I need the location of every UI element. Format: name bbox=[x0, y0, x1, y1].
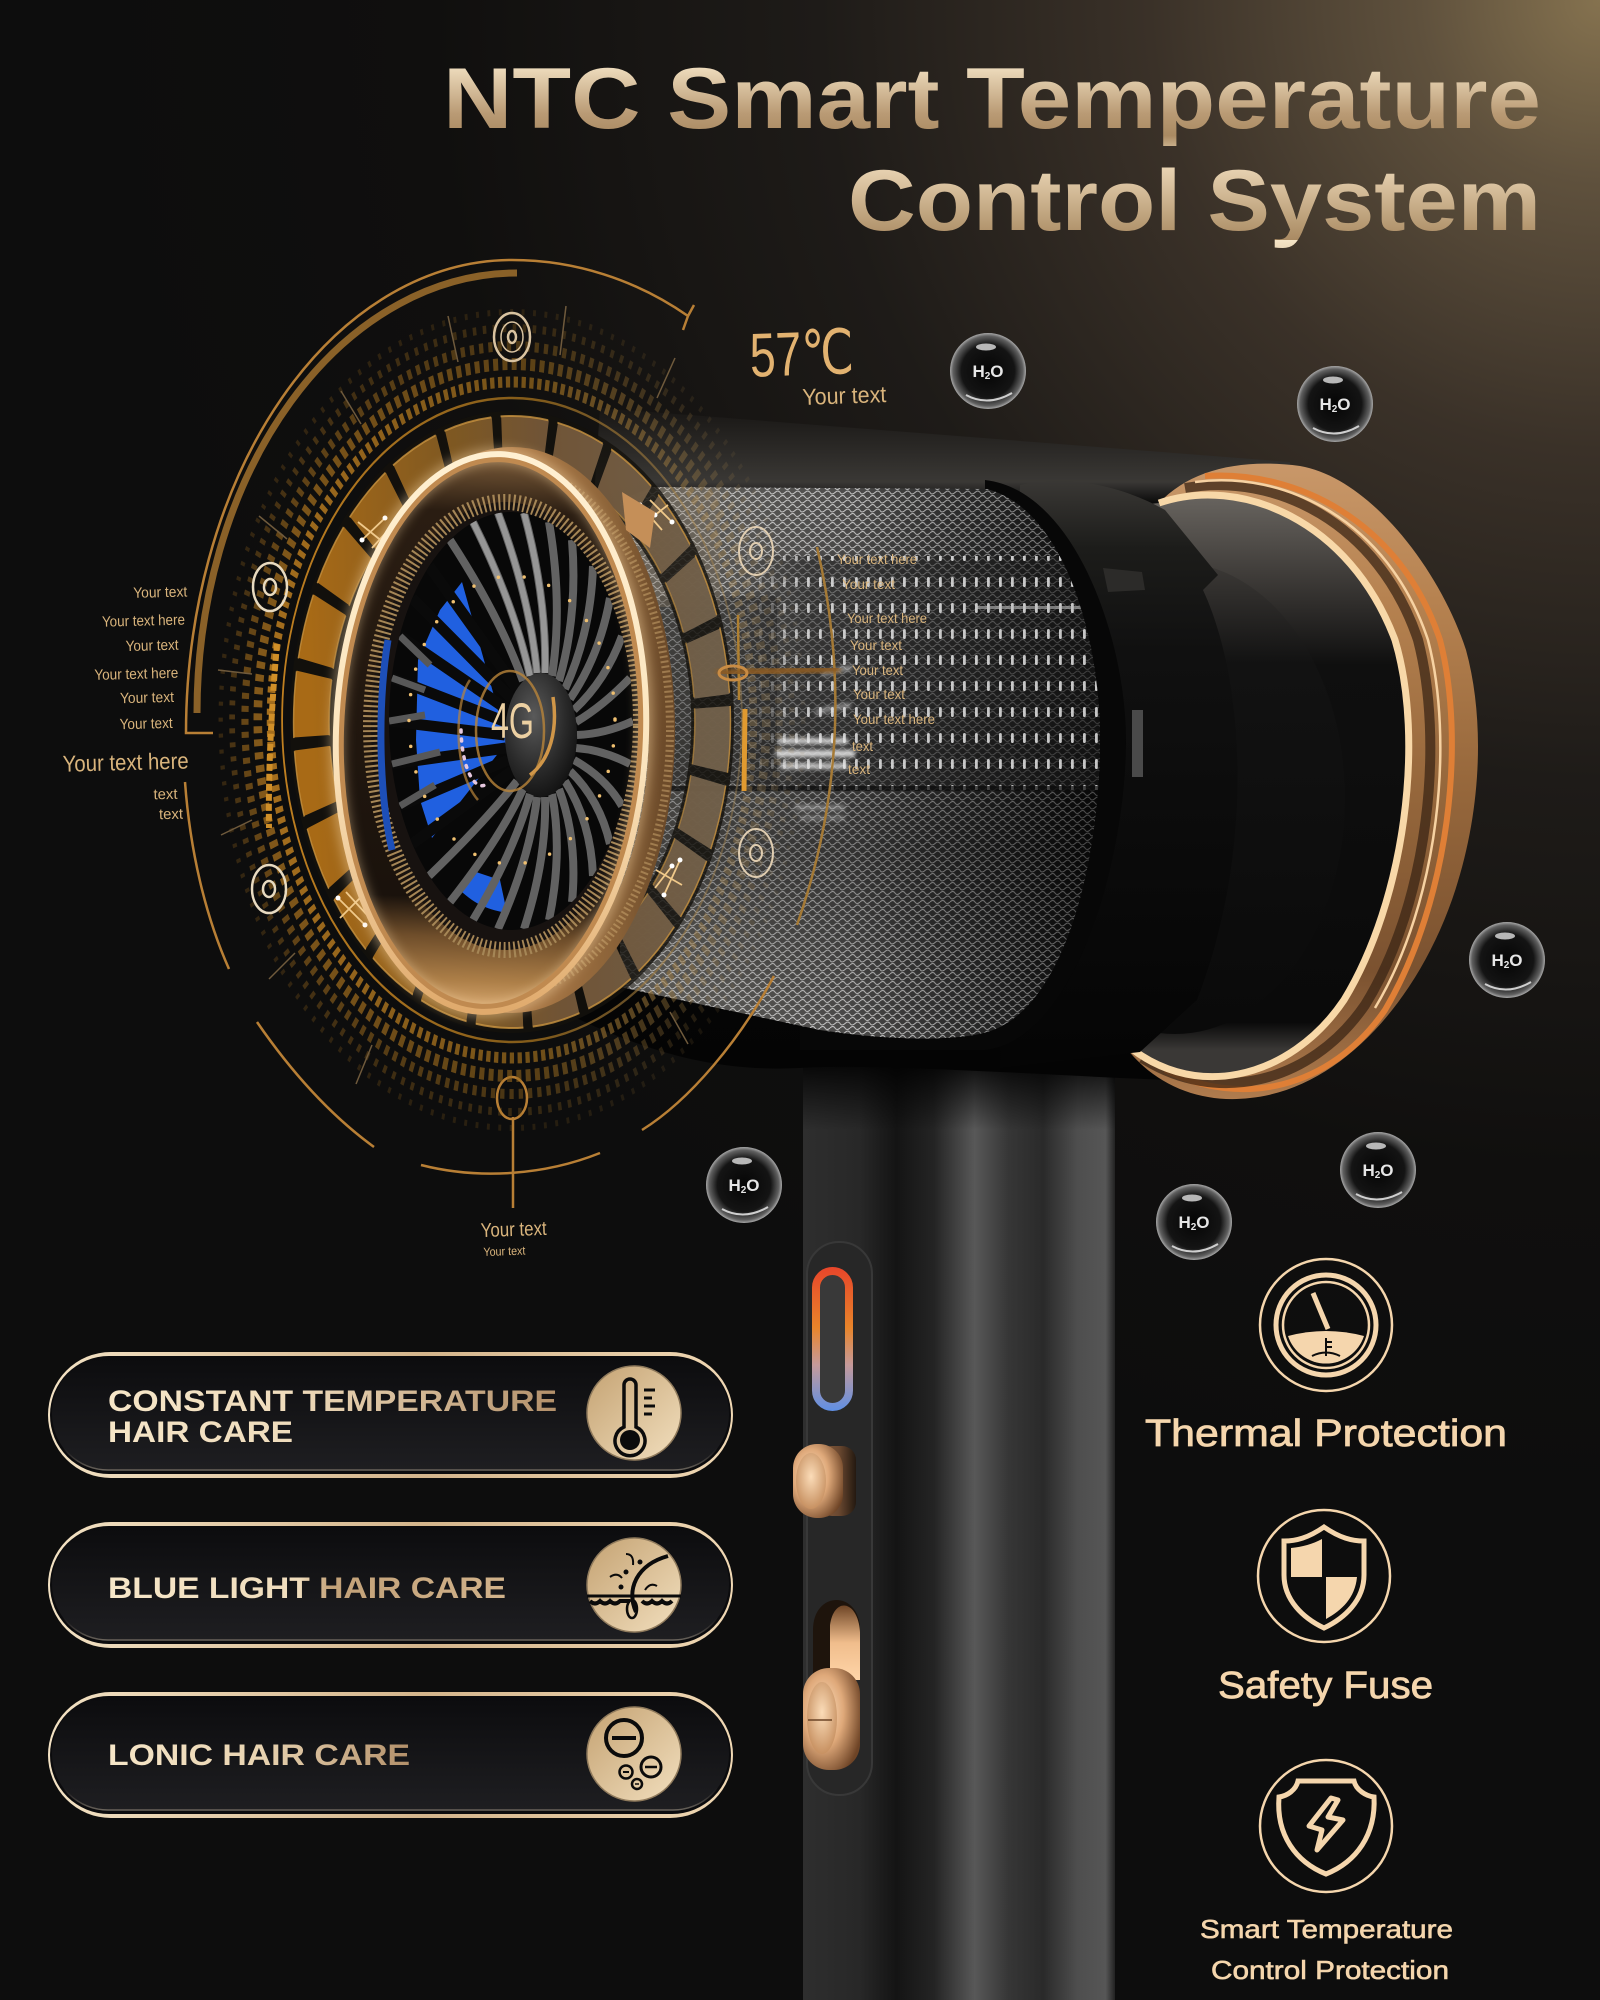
water bubble: O bbox=[746, 1176, 760, 1195]
icon: temperature gauge bbox=[1260, 1259, 1392, 1391]
HUD text list left: Your text bbox=[133, 583, 188, 602]
fan assembly bbox=[326, 449, 670, 1017]
HUD dotted rings bbox=[221, 312, 803, 1128]
blue backlight bbox=[381, 582, 507, 913]
water bubble: H bbox=[1491, 951, 1504, 970]
temperature LED ring bbox=[816, 1271, 849, 1407]
HUD accent bars and radial ticks bbox=[218, 306, 840, 1084]
ring interior bbox=[329, 452, 653, 1014]
water bubble: O bbox=[1509, 951, 1523, 970]
copper rear ring bbox=[1000, 464, 1478, 1099]
HUD text on mesh: Your text bbox=[852, 662, 903, 678]
title: NTC Smart Temperature bbox=[443, 51, 1541, 147]
fan blades bbox=[389, 513, 633, 929]
HUD text list left: Your text here bbox=[62, 747, 189, 777]
HUD text on mesh: Your text here bbox=[837, 551, 917, 567]
rear drum interior bbox=[1000, 495, 1409, 1077]
icon: quartered shield bbox=[1258, 1510, 1390, 1642]
HUD text on mesh: Your text here bbox=[847, 610, 927, 626]
metal mesh barrel bbox=[610, 480, 1120, 1050]
heading: LONIC HAIR CARE bbox=[108, 1739, 410, 1772]
water bubble: H bbox=[1362, 1161, 1375, 1180]
HUD text on mesh: Your text bbox=[853, 686, 905, 702]
HUD text bottom bbox=[480, 1218, 548, 1259]
water bubble: O bbox=[1380, 1161, 1394, 1180]
fan disc bbox=[389, 512, 633, 930]
HUD text list left: text bbox=[153, 786, 179, 803]
label: Control Protection bbox=[1211, 1955, 1449, 1985]
water bubble bbox=[1340, 1132, 1416, 1208]
copper slider bbox=[803, 1600, 860, 1770]
golden front ring bbox=[326, 449, 656, 1017]
hub bbox=[505, 673, 577, 797]
water bubble: O bbox=[990, 362, 1004, 381]
HUD target marker top bbox=[494, 313, 530, 361]
barrel front disc bbox=[800, 480, 1126, 1050]
tick ring bbox=[371, 502, 639, 950]
HUD text bottom: Your text bbox=[483, 1244, 526, 1259]
water bubble bbox=[950, 333, 1026, 409]
water bubble: H bbox=[972, 362, 985, 381]
water bubble: 2 bbox=[1191, 1222, 1197, 1233]
HUD target marker right upper bbox=[739, 527, 773, 575]
water bubble: H bbox=[1178, 1213, 1191, 1232]
HUD text list left bbox=[58, 583, 194, 826]
HUD text on mesh: Your text bbox=[842, 576, 895, 592]
HUD text list left: Your text here bbox=[94, 665, 179, 684]
HUD text on mesh: Your text bbox=[850, 637, 902, 653]
water bubble bbox=[1297, 366, 1373, 442]
centre HUD arcs bbox=[459, 671, 554, 800]
icon: bolt shield bbox=[1260, 1760, 1392, 1892]
hair dryer product bbox=[560, 408, 1478, 2000]
HUD text on mesh bbox=[837, 551, 935, 777]
heading: BLUE LIGHT HAIR CARE bbox=[108, 1572, 506, 1605]
HUD target marker left upper bbox=[253, 563, 287, 611]
HUD temperature read-out: Your text bbox=[802, 381, 887, 410]
water bubble bbox=[706, 1147, 782, 1223]
HUD text list left: text bbox=[159, 806, 184, 823]
heading bbox=[108, 1385, 557, 1449]
HUD crosshair marks bbox=[336, 500, 682, 928]
heading: HAIR CARE bbox=[108, 1416, 293, 1449]
control panel bbox=[793, 1242, 872, 1795]
dryer handle bbox=[803, 1060, 1115, 2000]
HUD text on mesh: text bbox=[852, 738, 873, 754]
HUD text list left: Your text bbox=[120, 689, 175, 707]
HUD text list left: Your text here bbox=[102, 612, 185, 631]
panel: blue light hair care bbox=[48, 1522, 733, 1648]
panel: lonic hair care bbox=[48, 1692, 733, 1818]
HUD gold segment ring bbox=[282, 400, 742, 1044]
water bubble: O bbox=[1196, 1213, 1210, 1232]
label: Smart Temperature bbox=[1200, 1914, 1453, 1944]
water bubble: 2 bbox=[1504, 960, 1510, 971]
copper barrel rim with ticks bbox=[354, 460, 670, 1000]
water bubble: H bbox=[1319, 395, 1332, 414]
panel: smart temperature control protection bbox=[1200, 1760, 1453, 1985]
HUD text on mesh: text bbox=[848, 761, 870, 777]
label: Thermal Protection bbox=[1145, 1413, 1507, 1455]
copper knob bbox=[793, 1444, 856, 1518]
water bubble: 2 bbox=[1332, 404, 1338, 415]
gold dots bbox=[409, 576, 615, 864]
heading: CONSTANT TEMPERATURE bbox=[108, 1385, 557, 1418]
centre label: 4G bbox=[491, 693, 534, 749]
HUD text on mesh: Your text here bbox=[853, 711, 935, 727]
water bubble: 2 bbox=[985, 371, 991, 382]
water bubble: 2 bbox=[1375, 1170, 1381, 1181]
icon: ions bbox=[587, 1707, 681, 1801]
label: Safety Fuse bbox=[1218, 1665, 1433, 1707]
HUD outer arcs bbox=[185, 260, 774, 1208]
HUD text list left: Your text bbox=[125, 637, 180, 655]
water bubble: H bbox=[728, 1176, 741, 1195]
title bbox=[443, 51, 1541, 249]
water bubble bbox=[1469, 922, 1545, 998]
label bbox=[1200, 1914, 1453, 1985]
HUD temperature read-out: 57℃ bbox=[749, 318, 855, 391]
rear collar bbox=[1000, 481, 1238, 1068]
HUD text list left: Your text bbox=[119, 715, 174, 733]
panel: safety fuse bbox=[1218, 1510, 1433, 1707]
water bubble bbox=[1156, 1184, 1232, 1260]
dryer body bbox=[560, 408, 1290, 1085]
HUD target marker left lower bbox=[252, 865, 286, 913]
icon: thermometer bbox=[587, 1366, 681, 1460]
water bubble: O bbox=[1337, 395, 1351, 414]
icon: hair follicle bbox=[587, 1538, 681, 1632]
panel: thermal protection bbox=[1145, 1259, 1507, 1455]
HUD text bottom: Your text bbox=[480, 1218, 547, 1242]
HUD target marker right lower bbox=[739, 829, 773, 877]
title: Control System bbox=[848, 153, 1541, 249]
panel: constant temperature hair care bbox=[48, 1352, 733, 1478]
water bubble: 2 bbox=[741, 1185, 747, 1196]
